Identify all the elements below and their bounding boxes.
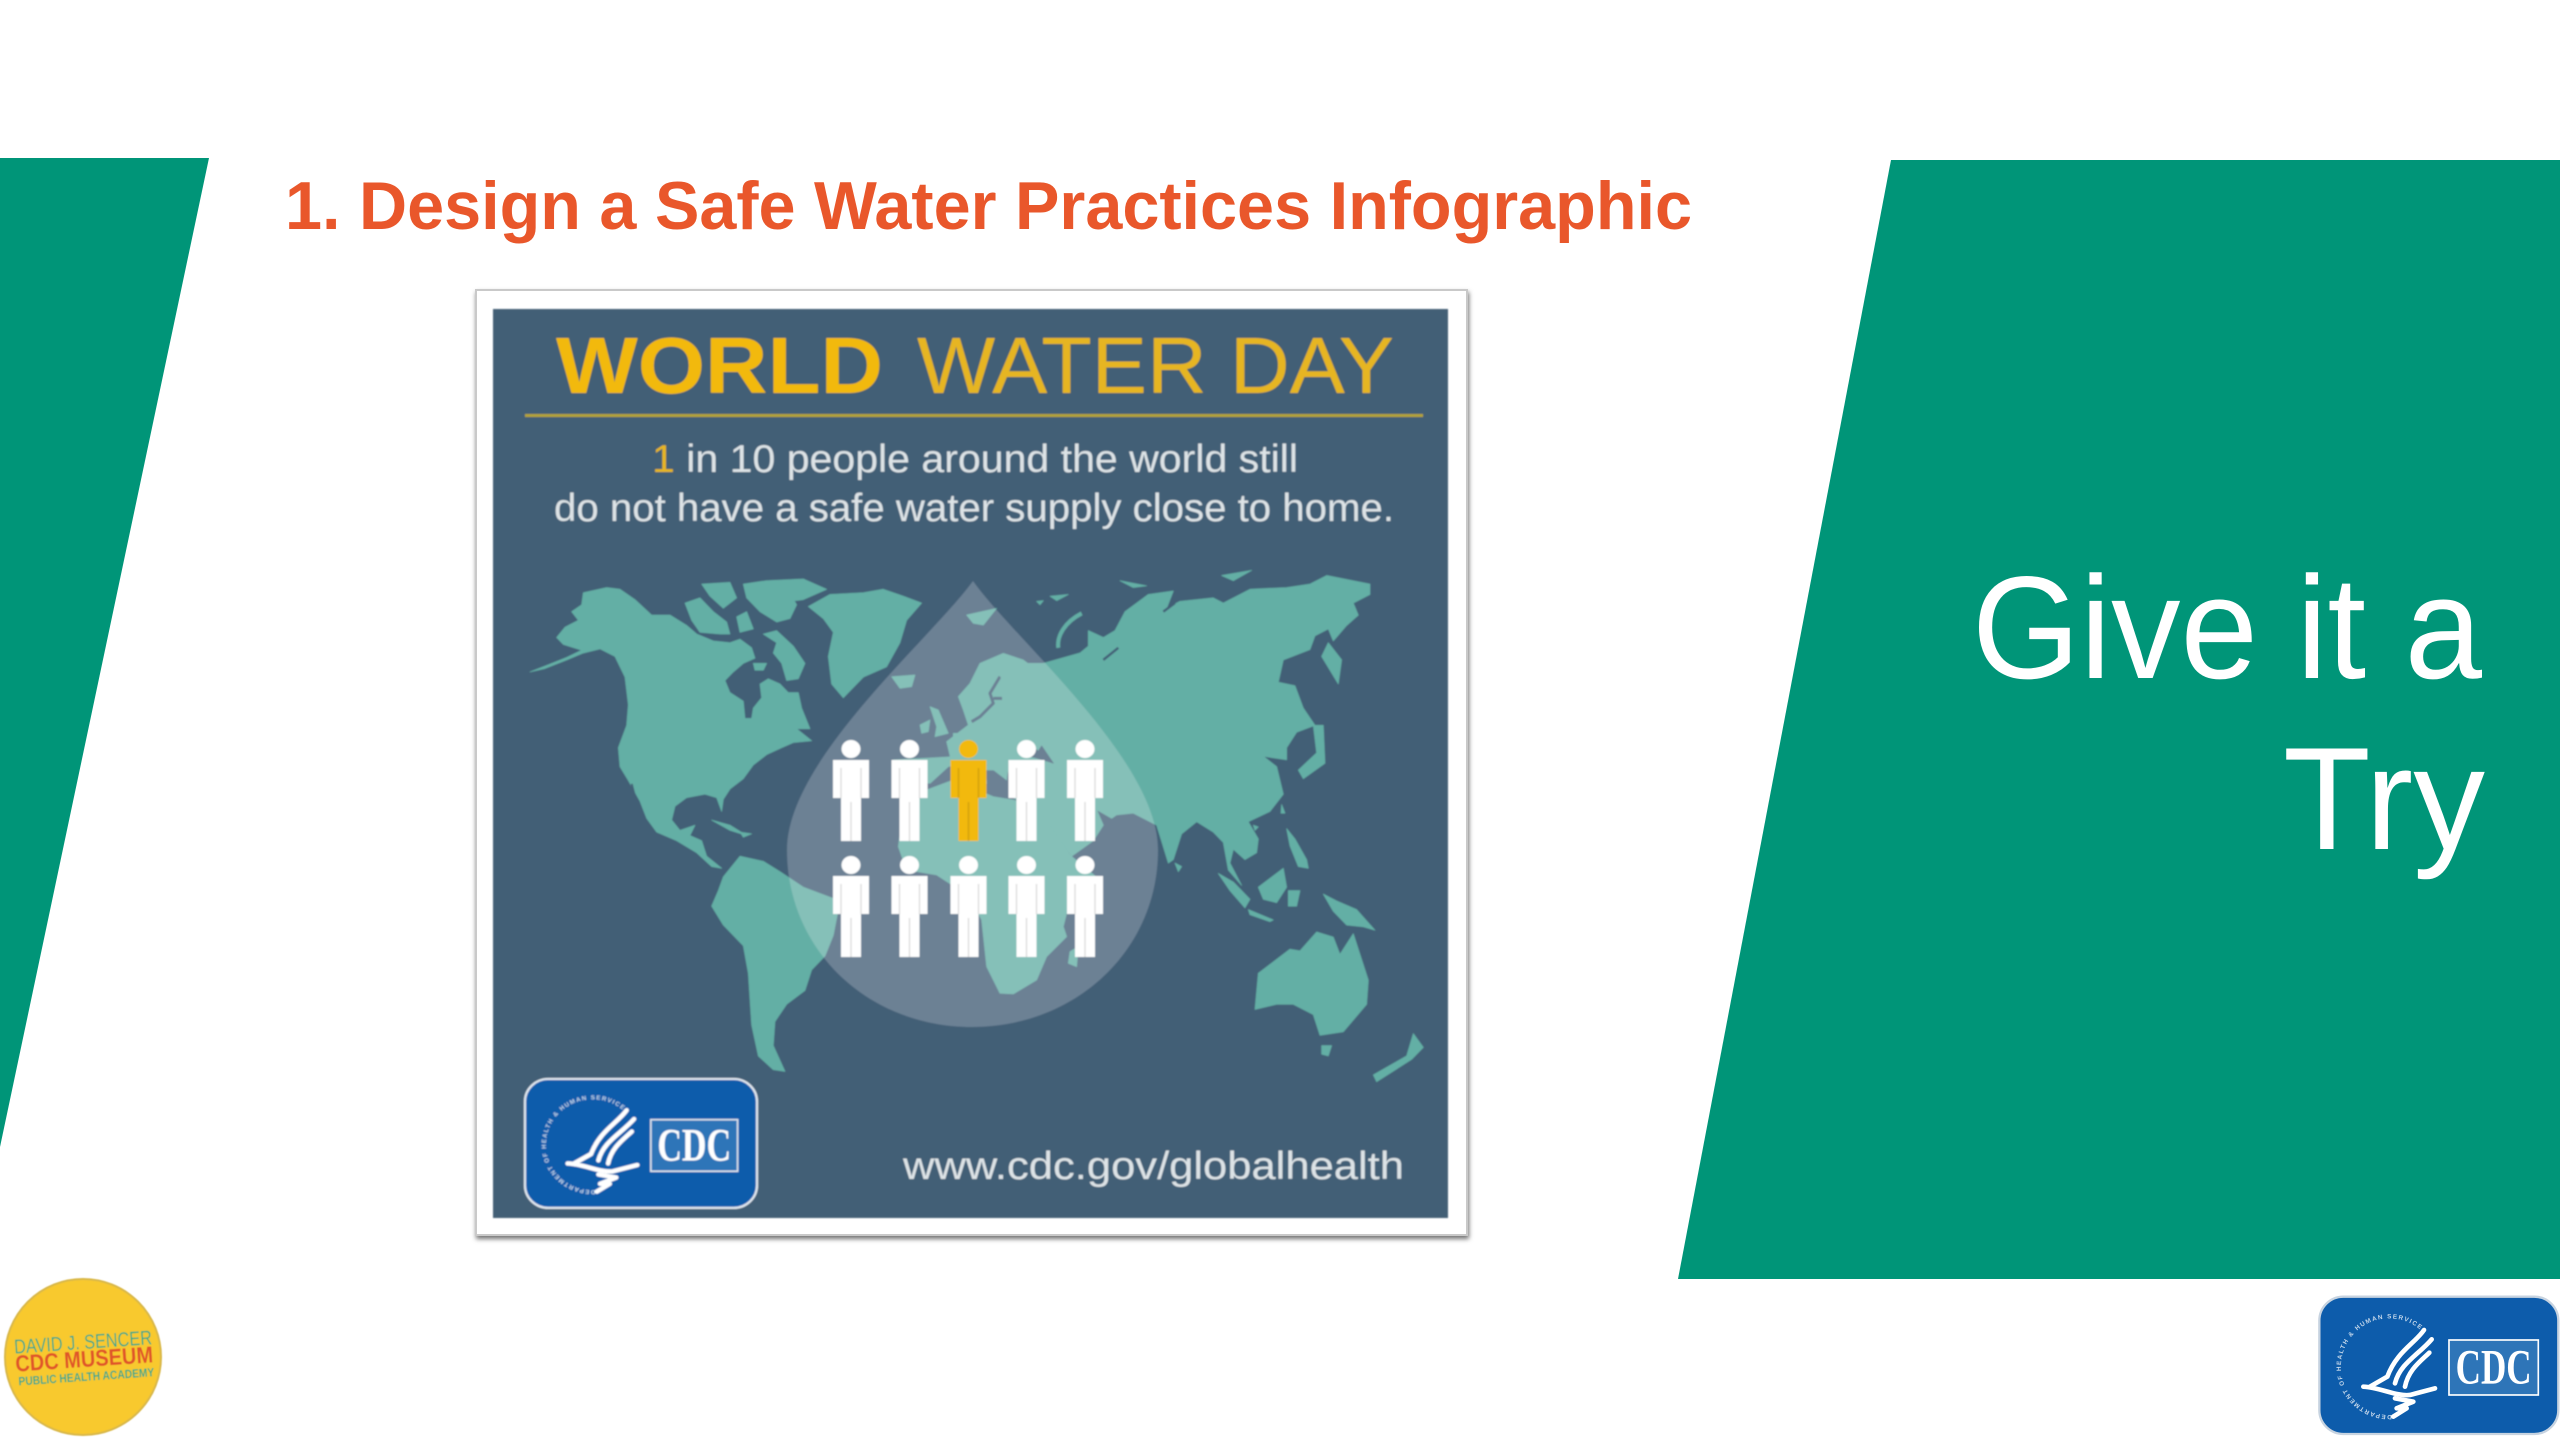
url text: www.cdc.gov/globalhealth bbox=[902, 1145, 1404, 1188]
cdc logo inside card: CDC bbox=[657, 1119, 731, 1171]
heading: world water day bbox=[556, 321, 1394, 410]
cdc logo bottom right bbox=[2318, 1296, 2560, 1436]
card frame bbox=[476, 290, 1467, 1235]
world map bbox=[530, 570, 1423, 1082]
callout: give it a try: Try bbox=[2283, 717, 2485, 880]
left teal panel bbox=[0, 158, 209, 1147]
water drop bbox=[787, 581, 1158, 1027]
right teal panel bbox=[1678, 160, 2560, 1279]
cdc logo inside card bbox=[522, 1076, 760, 1210]
card background bbox=[493, 309, 1448, 1218]
statistic text: 1 in 10 people around the world still bbox=[652, 438, 1298, 481]
badge: cdc museum public health academy: DAVID J. SENCER bbox=[13, 1327, 153, 1359]
cdc logo bottom right: DEPARTMENT OF HEALTH & HUMAN SERVICES USA bbox=[2336, 1314, 2422, 1420]
europe bbox=[892, 608, 1150, 770]
statistic text bbox=[554, 438, 1394, 530]
callout: give it a try: Give it a bbox=[1972, 546, 2483, 709]
heading: world water day: WATER DAY bbox=[917, 321, 1394, 410]
framed infographic card bbox=[472, 288, 1472, 1242]
asia and oceania bbox=[1000, 570, 1423, 1082]
cdc logo inside card: DEPARTMENT OF HEALTH & HUMAN SERVICES USA bbox=[540, 1094, 626, 1196]
title: 1. Design a Safe Water Practices Infographic bbox=[285, 168, 1692, 244]
southern europe and africa bbox=[893, 733, 1100, 994]
people pictogram: 1 in 10 bbox=[833, 740, 1103, 957]
statistic text: do not have a safe water supply close to home. bbox=[554, 487, 1394, 530]
badge: cdc museum public health academy bbox=[5, 1279, 161, 1435]
heading: world water day: WORLD bbox=[556, 321, 883, 410]
americas and greenland bbox=[530, 579, 922, 1071]
infographic content bbox=[492, 308, 1449, 1219]
heading rule bbox=[525, 414, 1423, 417]
badge: cdc museum public health academy: CDC MUSEUM bbox=[14, 1341, 154, 1377]
black sea bbox=[1020, 747, 1053, 763]
badge: cdc museum public health academy: PUBLIC HEALTH ACADEMY bbox=[18, 1365, 155, 1388]
callout: give it a try bbox=[1972, 546, 2485, 880]
